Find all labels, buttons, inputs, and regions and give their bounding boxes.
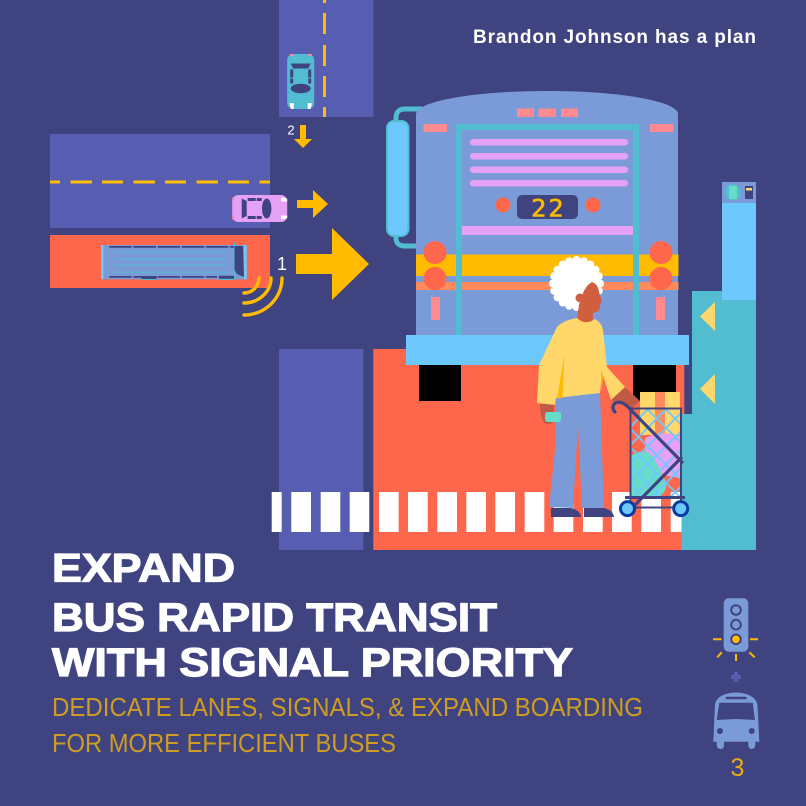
arrow: bus priority, numbered 1: 1 (277, 254, 287, 274)
tires (419, 365, 676, 401)
subheading: FOR MORE EFFICIENT BUSES (52, 728, 396, 758)
red lights (424, 198, 672, 290)
wire lattice (631, 409, 680, 497)
cart frame and handle (613, 402, 685, 508)
arrow: car flow down, numbered 2 (287, 122, 312, 148)
crosswalk stripes (272, 492, 682, 532)
road: top vertical street (279, 0, 374, 117)
subheading (52, 692, 643, 758)
page number 3: 3 (731, 754, 744, 782)
arrow: car flow down, numbered 2: 2 (287, 122, 295, 138)
shoes (551, 508, 614, 517)
cart contents (631, 392, 680, 497)
car: teal, heading down (287, 54, 314, 109)
yellow and orange bands (416, 254, 678, 290)
arrow: bus priority, numbered 1 (277, 228, 369, 300)
arrow: car flow right (297, 190, 328, 218)
heading: EXPAND (52, 546, 235, 590)
bumper (406, 335, 689, 365)
road: lower vertical street (279, 349, 363, 550)
road: dedicated red bus lane (50, 235, 270, 288)
car: pink, heading right (232, 195, 287, 222)
heading (52, 546, 573, 685)
hair (549, 256, 604, 311)
pink marker lights (424, 108, 674, 320)
rear door frame (459, 127, 636, 335)
boarding platform and fare kiosk (682, 182, 756, 550)
trousers (549, 392, 604, 508)
road: red bus lane at stop (373, 349, 684, 550)
road: left horizontal street (50, 134, 270, 228)
heading: BUS RAPID TRANSIT (52, 596, 497, 640)
mirror (387, 109, 422, 246)
vent lines (462, 139, 633, 235)
icon: plus sign (731, 672, 741, 682)
icon: bus front (713, 692, 759, 749)
top title: Brandon Johnson has a plan: Brandon Johnson has a plan (473, 27, 756, 48)
left hand with phone (540, 404, 561, 424)
wheels (620, 502, 688, 516)
heading: WITH SIGNAL PRIORITY (52, 641, 573, 685)
route number 22: 22 (531, 194, 566, 222)
right hand (611, 387, 640, 408)
sweater (537, 318, 625, 405)
bus body (416, 91, 678, 336)
icon: traffic light with yellow signal (713, 598, 758, 661)
icon: signal waves from bus (244, 278, 282, 315)
subheading: DEDICATE LANES, SIGNALS, & EXPAND BOARDING (52, 692, 643, 722)
route number 22 (517, 194, 578, 222)
head and neck (577, 282, 602, 324)
shopping cart (613, 392, 688, 516)
sweater shadow (557, 355, 603, 398)
bus: top view in the dedicated lane (101, 242, 247, 280)
bus: rear view (387, 91, 689, 401)
person: woman waiting with cart (537, 256, 640, 517)
